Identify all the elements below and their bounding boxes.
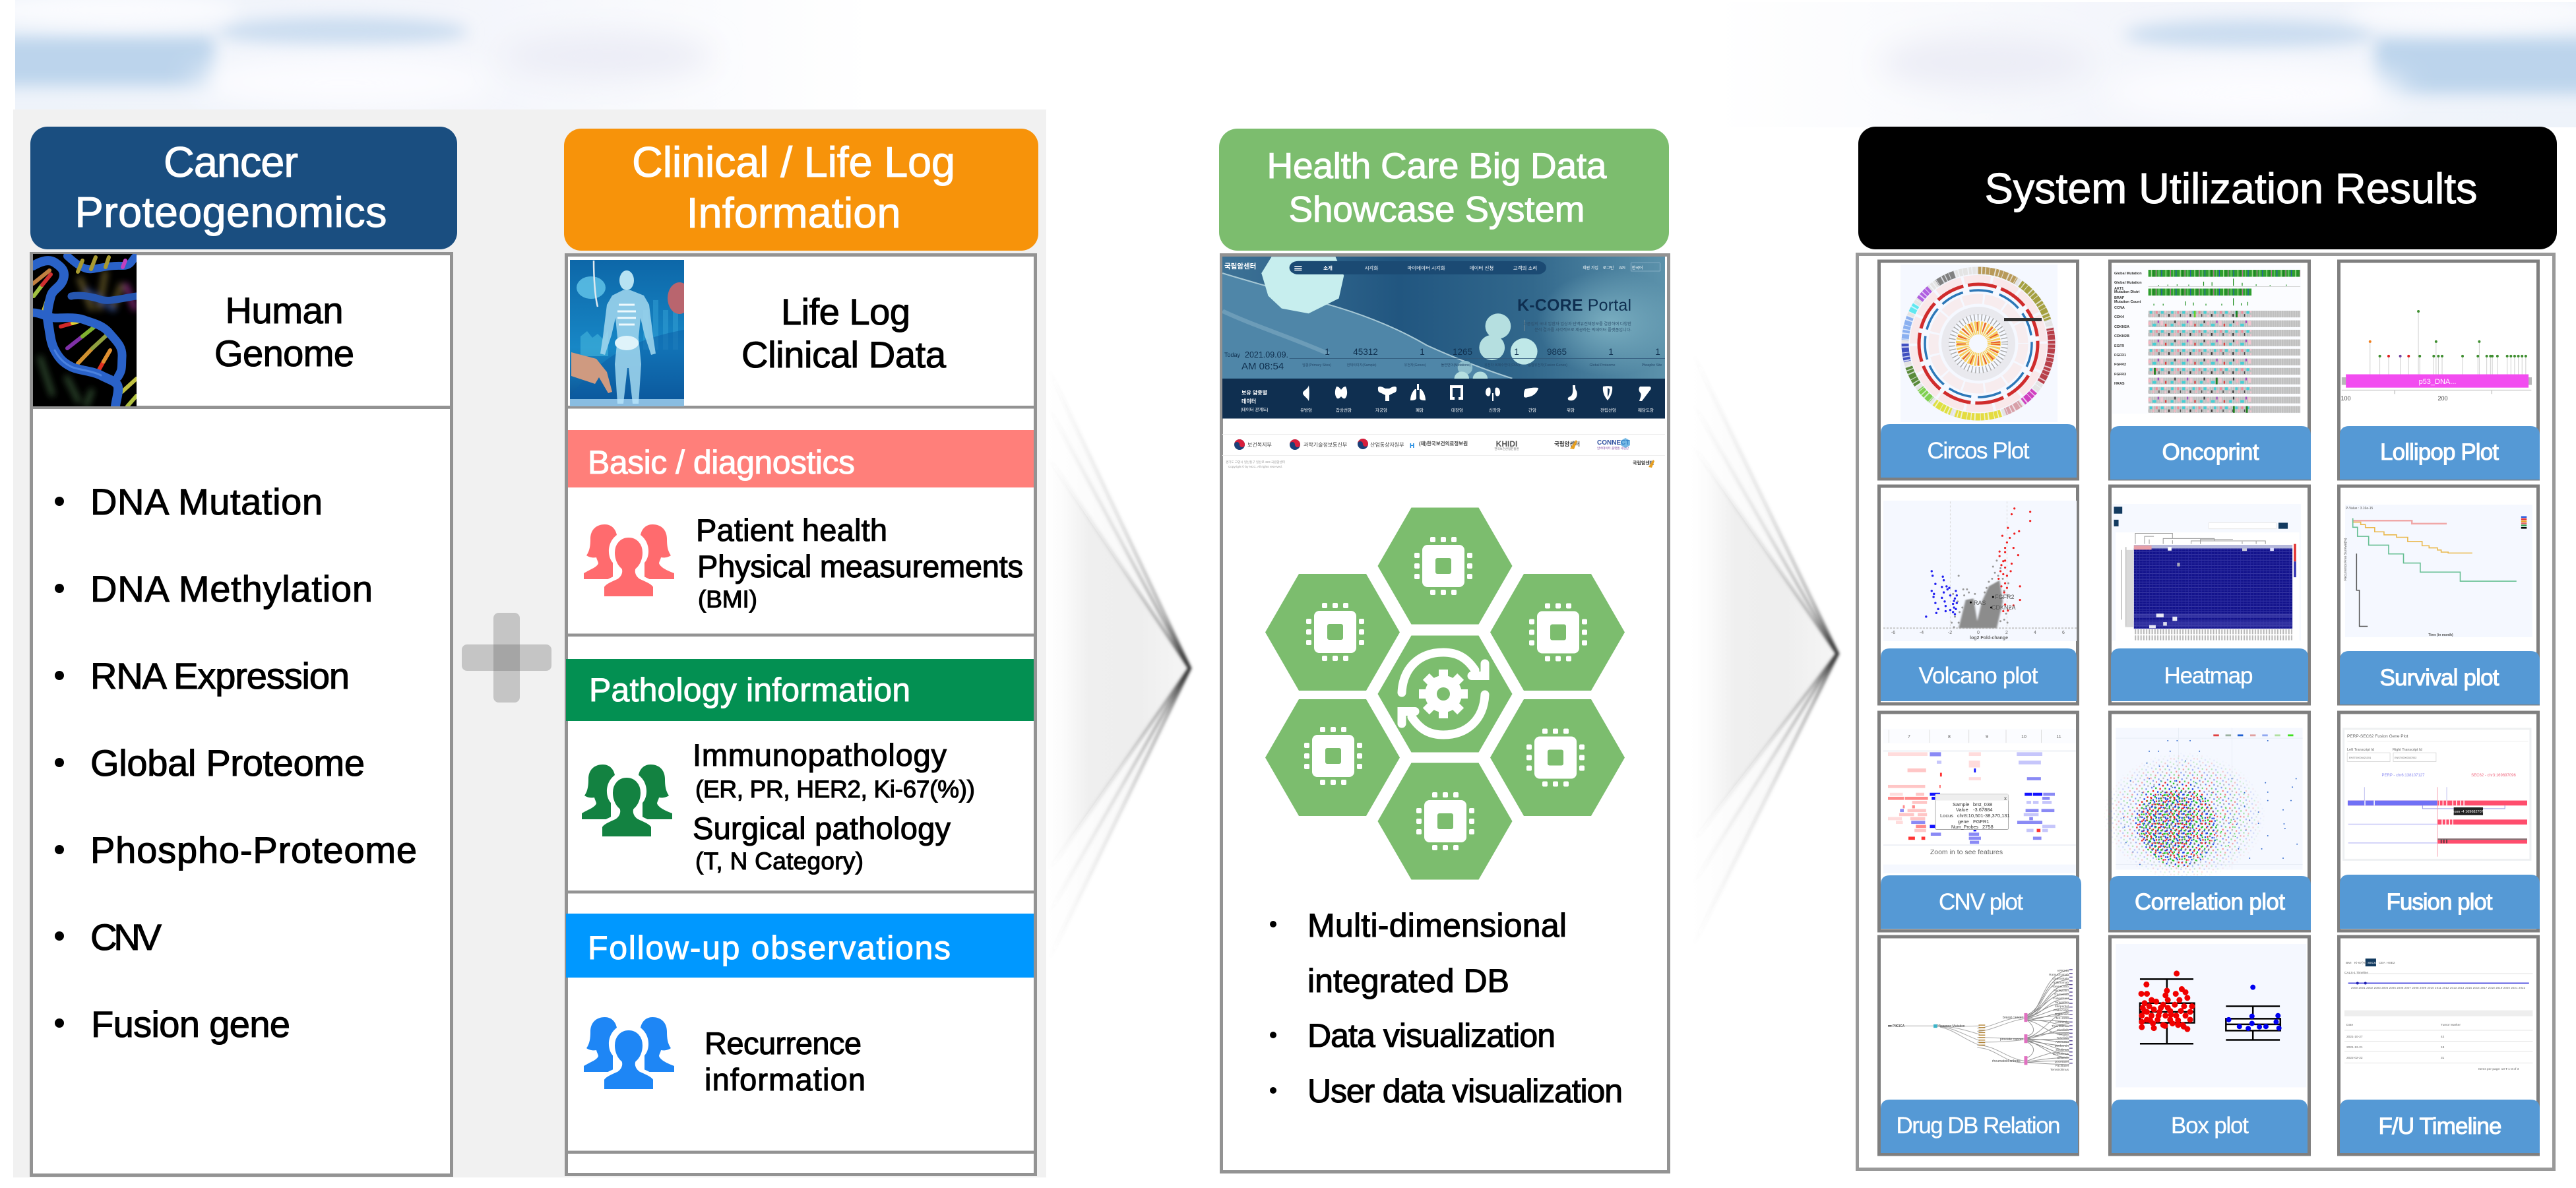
chart: CNV: 8 xyxy=(1948,735,1951,739)
chart: CNV: Sample xyxy=(1953,801,1969,807)
list: system features: Data visualization xyxy=(1307,1017,1555,1054)
strip: partner logos: 보건복지부 xyxy=(1247,441,1272,448)
bar: organ icons: 신장암 xyxy=(1489,407,1501,413)
bar: organ icons: 데이터 xyxy=(1241,398,1256,404)
cell: box plot xyxy=(2110,937,2309,1154)
section: follow-up observations: Follow-up observations xyxy=(588,929,951,966)
list: system features xyxy=(1270,907,1623,1110)
chart: oncoprint: CCNA xyxy=(2114,306,2125,310)
chart: oncoprint: HRAS xyxy=(2114,382,2125,386)
label: Heatmap xyxy=(2164,663,2253,689)
chart: lollipop: p53_DNA... xyxy=(2419,378,2456,386)
chart: fusion: Left Transcript Id xyxy=(2347,748,2374,752)
chart: drug network: prostate cancer xyxy=(2000,1038,2023,1042)
label xyxy=(2110,876,2311,930)
text: Human Genome: Genome xyxy=(214,332,354,374)
bar: organ icons: 대장암 xyxy=(1451,407,1463,413)
strip: partner logos: CONNECT xyxy=(1597,439,1629,447)
cell: volcano plot xyxy=(1879,486,2078,704)
section: pathology information: Pathology information xyxy=(589,672,910,708)
list: system features: Multi-dimensional xyxy=(1307,907,1567,944)
chart: drug network: Temsirolimus xyxy=(2050,1068,2069,1072)
label xyxy=(1881,424,2077,478)
cell: oncoprint xyxy=(2110,261,2311,480)
footer: portal address: 경기도 고양시 일산동구 일산로 323 국립암센터 xyxy=(1226,460,1285,464)
icon: people red xyxy=(584,524,674,598)
list: omics data types xyxy=(55,481,417,1045)
heading: Health Care Big Data Showcase System: Health Care Big Data xyxy=(1267,145,1607,186)
chart: timeline: CEA xyxy=(2379,961,2386,965)
chart: CNV: Num_Probes xyxy=(1951,825,1978,830)
bar: organ icons: 간암 xyxy=(1528,407,1536,413)
list: omics data types: CNV xyxy=(90,916,162,958)
text: recurrence information xyxy=(705,1026,865,1097)
chart: drug network: Tamoxifen xyxy=(2054,1001,2069,1005)
arrow: left to centre xyxy=(1046,367,1190,961)
label: Circos Plot xyxy=(1928,438,2030,464)
screenshot: K-CORE portal: 국립암센터 xyxy=(1224,262,1256,270)
cell: circos plot xyxy=(1875,241,2081,479)
cell: CNV plot xyxy=(1879,712,2081,931)
background sky: left clouds xyxy=(15,0,713,109)
chart: oncoprint: AKT1 xyxy=(2114,287,2123,291)
label: F/U Timeline xyxy=(2379,1113,2501,1139)
text: pathology details: (ER, PR, HER2, Ki-67(%)) xyxy=(695,776,975,803)
label xyxy=(2340,426,2540,480)
chart: CNV: 10 xyxy=(2021,735,2026,739)
list: omics data types: Fusion gene xyxy=(91,1003,290,1045)
chart: drug network: Stiripentol xyxy=(2055,1005,2069,1009)
footer: portal address: 국립암센터 xyxy=(1633,460,1654,466)
text: Human Genome xyxy=(214,290,354,374)
chart: fusion: ENST00000337002 xyxy=(2395,757,2416,759)
chart: drug network: Everolimus xyxy=(2053,1052,2069,1056)
list: system features: integrated DB xyxy=(1307,962,1509,999)
chart: oncoprint: EGFR xyxy=(2114,344,2124,348)
background sky: right clouds xyxy=(1877,2,2576,127)
chart: fusion: SEC62 - chr3:169697096 xyxy=(2471,774,2517,778)
chart: survival: Time (in month) xyxy=(2428,633,2453,637)
label: Fusion plot xyxy=(2387,889,2493,915)
screenshot: K-CORE portal: 45312 xyxy=(1353,347,1378,357)
chart: survival xyxy=(2344,505,2532,637)
chart: drug network: Taselisib xyxy=(2057,1036,2069,1040)
label xyxy=(1881,648,2077,701)
screenshot: K-CORE portal: 시각화 xyxy=(1365,265,1378,271)
screenshot: K-CORE portal: 암종(Primary Sites) xyxy=(1302,362,1331,367)
bar: organ icons: 자궁암 xyxy=(1375,407,1387,413)
screenshot: K-CORE portal: 1 xyxy=(1514,347,1519,357)
panel: utilization results xyxy=(1858,241,2554,1169)
text: patient health: (BMI) xyxy=(698,586,757,613)
label: Lollipop Plot xyxy=(2380,439,2499,465)
text: pathology details xyxy=(693,737,975,875)
chart: volcano: -2 xyxy=(1948,631,1952,635)
label xyxy=(2340,651,2540,704)
list: omics data types: RNA Expression xyxy=(90,655,350,697)
screenshot: K-CORE portal: 소개 xyxy=(1323,265,1333,271)
screenshot: K-CORE portal: 1 xyxy=(1420,347,1425,357)
list: omics data types: Global Proteome xyxy=(90,742,365,784)
bar: organ icons: 보유 암종별 xyxy=(1241,389,1267,396)
chart: volcano: FGFR2 xyxy=(1995,594,2015,600)
chart: oncoprint: FGFR1 xyxy=(2114,354,2126,358)
icon: hexagon cluster xyxy=(1265,508,1625,880)
chart: drug network: Paclitaxel xyxy=(2055,1064,2069,1068)
chart: drug network: MK-2206 xyxy=(2056,1016,2069,1020)
chart: volcano: CDKN2A xyxy=(1992,604,2016,611)
chart: drug network: Trametinib xyxy=(2054,993,2069,997)
chart: oncoprint: Global Mutation xyxy=(2114,272,2142,276)
panel: cancer proteogenomics xyxy=(32,253,452,1175)
icon: people green xyxy=(582,765,672,838)
footer: portal address xyxy=(1226,460,1654,468)
screenshot: K-CORE portal: 9865 xyxy=(1547,347,1567,357)
section: pathology information xyxy=(566,659,1034,875)
cell: follow-up timeline xyxy=(2339,937,2540,1154)
chart: timeline: 2021-10-27 xyxy=(2346,1035,2363,1039)
chart: oncoprint: CDK4 xyxy=(2114,315,2125,319)
screenshot: K-CORE portal: 유전자 복제수변이(CNV) xyxy=(1484,362,1520,367)
screenshot: K-CORE portal: API xyxy=(1619,266,1625,270)
chart: oncoprint: BRAF xyxy=(2114,296,2125,300)
chart: box plot xyxy=(2116,944,2306,1087)
section: basic diagnostics: Basic / diagnostics xyxy=(588,444,855,481)
chart: volcano: 6 xyxy=(2062,631,2065,635)
chart: oncoprint xyxy=(2112,265,2301,414)
heading: Cancer Proteogenomics xyxy=(30,127,457,249)
chart: lollipop: 200 xyxy=(2437,395,2448,402)
image: DNA helix xyxy=(33,254,137,406)
screenshot: K-CORE portal: 1 xyxy=(1325,347,1330,357)
label: Oncoprint xyxy=(2162,439,2259,465)
text: Human Genome: Human xyxy=(226,290,343,331)
footer: portal address: Copyright © by NCC. All rights reserved. xyxy=(1228,464,1282,468)
screenshot: K-CORE portal: 회원 가입 xyxy=(1583,265,1598,270)
bar: organ icons: 췌담도암 xyxy=(1638,408,1654,413)
chart: drug network: Letrozole xyxy=(2056,1020,2069,1024)
chart: CNV: 9 xyxy=(1986,735,1988,739)
chart: CNV: Locus xyxy=(1940,813,1953,819)
chart: drug network: Docetaxel xyxy=(2055,1060,2069,1064)
chart: volcano: 2 xyxy=(2005,631,2008,635)
cell: heatmap xyxy=(2110,486,2309,704)
label: Volcano plot xyxy=(1918,663,2038,689)
screenshot: K-CORE portal: 전체이미지(Sample) xyxy=(1347,362,1377,367)
chart: lollipop: 100 xyxy=(2340,395,2351,402)
screenshot: K-CORE portal: K-CORE Portal xyxy=(1517,296,1631,315)
label xyxy=(1881,875,2081,929)
cell: correlation plot xyxy=(2103,712,2311,931)
text: recurrence information: information xyxy=(705,1062,865,1097)
chart: drug network: Buparlisib xyxy=(2055,1013,2069,1016)
label: CNV plot xyxy=(1939,889,2023,915)
chart: timeline: 2000 2001 2002 2003 2004 2005 2006 2007 2008 2009 2010 2011 2012 2013 2014 2015 2016 2017 2018 2019 2020 2021 2022 xyxy=(2351,986,2526,989)
arrow: centre to results xyxy=(1691,351,1838,948)
strip: partner logos: 국립암센터 xyxy=(1554,441,1580,447)
heading: System Utilization Results xyxy=(1858,127,2557,249)
chart: CNV: chr8:10,501-38,370,131 xyxy=(1957,813,2010,819)
section: basic diagnostics xyxy=(568,430,1034,613)
chart: timeline: Date xyxy=(2346,1023,2353,1027)
chart: fusion: Right Transcript Id xyxy=(2393,748,2422,752)
strip: partner logos: KHIDI xyxy=(1496,439,1517,449)
chart: drug network: Pictilisib xyxy=(2058,1028,2069,1032)
icon: plus sign xyxy=(462,613,551,703)
strip: partner logos: H xyxy=(1410,443,1414,450)
bar: organ icons: 폐암 xyxy=(1416,407,1424,413)
chart: CNV: 7 xyxy=(1908,735,1910,739)
heading: Cancer Proteogenomics: Proteogenomics xyxy=(75,188,387,236)
chart: timeline: CALS-1 Timeline xyxy=(2344,971,2368,975)
bar: organ icons: 위암 xyxy=(1567,408,1575,413)
screenshot: K-CORE portal: 1 xyxy=(1608,347,1614,357)
strip: partner logos: 한국보건산업진흥원 xyxy=(1494,447,1519,451)
label xyxy=(2340,875,2540,929)
chart: volcano: log2 Fold-change xyxy=(1970,636,2008,641)
chart: drug network: PIK3CA xyxy=(1893,1024,1905,1028)
chart: CNV xyxy=(1883,729,2076,873)
chart: volcano: -6 xyxy=(1891,631,1895,635)
chart: CNV: gene xyxy=(1958,819,1969,825)
chart: oncoprint: Global Mutation xyxy=(2114,281,2142,285)
heading: Clinical / Life Log Information xyxy=(564,129,1038,251)
chart: CNV: brst_038 xyxy=(1973,801,1992,807)
screenshot: K-CORE portal: 유전자(Genes) xyxy=(1404,362,1426,367)
chart: timeline: BMI xyxy=(2346,961,2352,965)
chart: fusion: PERP-SEC62 Fusion Gene Plot xyxy=(2347,734,2408,739)
icon: gear with cycle arrows xyxy=(1402,652,1485,735)
text: pathology details: Surgical pathology xyxy=(693,811,951,846)
list: omics data types: Phospho-Proteome xyxy=(90,829,417,871)
list: omics data types: DNA Methylation xyxy=(90,568,373,610)
chart: CNV: -3.67884 xyxy=(1973,807,1993,813)
screenshot: K-CORE portal: 돌연변이(Mutations) xyxy=(1441,362,1471,367)
chart: timeline: SEC62 xyxy=(2368,961,2378,965)
cell: survival plot xyxy=(2339,486,2540,704)
strip: partner logos: 과학기술정보통신부 xyxy=(1304,441,1347,448)
label: Drug DB Relation xyxy=(1896,1113,2061,1139)
list: system features: User data visualization xyxy=(1307,1073,1623,1110)
chart: timeline xyxy=(2344,958,2532,1071)
chart: drug network: Fulvestrant xyxy=(2053,997,2069,1001)
chart: correlation scatter xyxy=(2103,728,2303,880)
screenshot: K-CORE portal: 마이데이터 시각화 xyxy=(1407,265,1445,271)
chart: timeline: 2021-12-21 xyxy=(2346,1046,2363,1049)
chart: heatmap xyxy=(2112,504,2301,641)
label: Box plot xyxy=(2171,1113,2249,1139)
chart: drug network: Metformin xyxy=(2055,1044,2069,1048)
chart: CNV: Value xyxy=(1956,807,1968,813)
heading: Clinical / Life Log Information: Information xyxy=(686,189,901,237)
heading: Clinical / Life Log Information: Clinical / Life Log xyxy=(632,138,955,186)
cell: drug DB relation xyxy=(1879,937,2078,1154)
chart: CNV: 2758 xyxy=(1982,824,1994,830)
chart: CNV: FGFR1 xyxy=(1973,819,1990,825)
light grey backdrop behind left columns xyxy=(13,109,1046,1177)
bar: organ icons: 전립선암 xyxy=(1600,407,1616,413)
chart: CNV: x xyxy=(2004,796,2007,801)
chart: timeline: Tumor Marker xyxy=(2441,1023,2461,1027)
chart: drug network: Abemaciclib xyxy=(2052,985,2069,989)
chart: timeline: 18 xyxy=(2441,1046,2445,1049)
chart: volcano: 0 xyxy=(1977,631,1980,635)
chart: volcano: 4 xyxy=(2034,631,2036,635)
chart: circos xyxy=(1875,241,2081,447)
strip: partner logos xyxy=(1222,434,1665,456)
chart: survival: Recurrence Free Survival(%) xyxy=(2344,538,2348,580)
chart: CNV: Zoom in to see features xyxy=(1930,848,2003,856)
screenshot: K-CORE portal: Global Proteome xyxy=(1590,363,1616,367)
screenshot: K-CORE portal: 융합유전자(Fusion Genes) xyxy=(1528,362,1567,367)
bar: organ icons xyxy=(1222,379,1665,418)
screenshot: K-CORE portal: 1265 xyxy=(1453,347,1472,357)
label: Correlation plot xyxy=(2135,889,2285,915)
label xyxy=(2340,1100,2540,1153)
chart: timeline: 42 xyxy=(2441,1035,2445,1039)
chart: drug network: Alpelisib xyxy=(2057,1032,2069,1036)
chart: drug network: rheumatoid arthritis xyxy=(1992,1059,2021,1063)
screenshot: K-CORE portal: AM 08:54 xyxy=(1241,361,1284,372)
image: human body scan xyxy=(570,260,691,406)
heading: Health Care Big Data Showcase System xyxy=(1219,129,1669,251)
screenshot: K-CORE portal: 2021.09.09. xyxy=(1245,350,1288,360)
bar: organ icons: 갑상선암 xyxy=(1336,407,1352,413)
chart: fusion: PERP - chr6:138107127 xyxy=(2382,774,2425,778)
chart: oncoprint: Mutation Count xyxy=(2114,300,2141,304)
chart: oncoprint: FGFR2 xyxy=(2114,363,2126,367)
chart: fusion: exon -4 169682707 xyxy=(2452,810,2484,814)
chart: volcano: -4 xyxy=(1920,631,1924,635)
list: omics data types: DNA Mutation xyxy=(90,481,323,522)
chart: drug network: Nedaplatin xyxy=(2054,989,2069,993)
bar: organ icons: 유방암 xyxy=(1300,407,1312,413)
chart: drug network: Missense Mutation xyxy=(1937,1024,1965,1028)
strip: partner logos: 산업통상자원부 xyxy=(1370,441,1404,448)
heading: Cancer Proteogenomics: Cancer xyxy=(164,138,298,186)
strip: partner logos: 암빅데이터 플랫폼 사업단 xyxy=(1597,446,1629,451)
bar: organ icons: [데이터 관계도] xyxy=(1241,406,1268,412)
panel: clinical and life log xyxy=(566,255,1036,1174)
chart: drug network: APR246 xyxy=(2057,969,2069,973)
label xyxy=(2110,426,2311,480)
heading: Health Care Big Data Showcase System: Showcase System xyxy=(1289,189,1585,230)
screenshot: K-CORE portal: 데이터 신청 xyxy=(1470,265,1493,271)
label xyxy=(2112,1100,2308,1153)
chart: volcano xyxy=(1883,501,2077,641)
heading: System Utilization Results: System Utilization Results xyxy=(1984,164,2478,212)
chart: timeline: 31 xyxy=(2441,1056,2445,1060)
chart: oncoprint: Mutation Distri xyxy=(2114,290,2140,294)
text: patient health: Physical measurements xyxy=(697,549,1023,584)
cell: lollipop plot xyxy=(2339,261,2540,480)
chart: timeline: Items per page: 10 ▾ 1-3 of 3 xyxy=(2478,1067,2519,1071)
chart: drug network: breast cancer xyxy=(2003,1016,2023,1020)
chart: drug network: Erlotinib xyxy=(2058,1056,2069,1060)
screenshot: K-CORE portal: 분석 결과를 시각적으로 제공하는 빅데이터 플랫폼입니다. xyxy=(1534,327,1631,332)
strip: partner logos: (재)한국보건의료정보원 xyxy=(1419,440,1468,447)
screenshot: K-CORE portal: 고품질의 국내 암환자 임상과 단백유전체정보를 결합하여 다양한 xyxy=(1523,321,1631,327)
label: Survival plot xyxy=(2380,665,2499,691)
chart: fusion xyxy=(2344,729,2530,860)
section: follow-up observations xyxy=(566,914,1034,1097)
screenshot: K-CORE portal: 1 xyxy=(1655,347,1660,357)
chart: timeline: 2022-02-22 xyxy=(2346,1056,2363,1060)
chart: drug network: Ramucirumab xyxy=(2049,973,2069,977)
chart: drug network: Thioridazine xyxy=(2052,1024,2069,1028)
text: pathology details: (T, N Category) xyxy=(695,848,864,875)
chart: oncoprint: CDKN2A xyxy=(2114,325,2129,329)
chart: survival: P-Value : 3.16e-15 xyxy=(2346,507,2373,511)
text: Life Log Clinical Data: Life Log xyxy=(781,291,910,332)
text: Life Log Clinical Data: Clinical Data xyxy=(741,334,947,375)
chart: volcano: RAS xyxy=(1974,600,1986,606)
chart: oncoprint: CDKN2B xyxy=(2114,334,2129,338)
cell: fusion plot xyxy=(2339,712,2540,931)
chart: oncoprint: FGFR3 xyxy=(2114,373,2126,377)
screenshot: K-CORE portal: 고객의 소리 xyxy=(1513,265,1537,271)
chart: drug network: Gadoxetate xyxy=(2052,977,2069,981)
chart: drug network: Ipilimumab xyxy=(2054,981,2069,985)
chart: drug network: Sirolimus xyxy=(2056,1048,2069,1052)
chart: lollipop xyxy=(2340,311,2532,402)
screenshot: K-CORE portal: Today xyxy=(1224,352,1241,358)
chart: fusion: ENST00000421351 xyxy=(2349,757,2371,759)
chart: timeline: Ki-67(%) xyxy=(2354,961,2367,965)
label xyxy=(1881,1100,2078,1153)
screenshot: K-CORE portal: 한국어 xyxy=(1632,265,1643,270)
text: pathology details: Immunopathology xyxy=(693,737,947,772)
text: patient health xyxy=(696,513,1023,613)
label xyxy=(2111,648,2308,701)
panel: showcase system xyxy=(1222,255,1682,1172)
screenshot: K-CORE portal: 로그인 xyxy=(1603,266,1614,270)
text: patient health: Patient health xyxy=(696,513,887,547)
screenshot: K-CORE portal: Phospho Site xyxy=(1642,363,1662,367)
chart: drug network: Palbociclib xyxy=(2054,1009,2069,1013)
chart: drug network xyxy=(1888,969,2073,1072)
chart: drug network: AZD5363 xyxy=(2056,1040,2069,1044)
screenshot: K-CORE portal xyxy=(1222,257,1682,468)
text: recurrence information: Recurrence xyxy=(705,1026,862,1061)
chart: timeline: HSE2 xyxy=(2387,961,2395,965)
icon: people blue xyxy=(584,1017,674,1091)
chart: CNV: 11 xyxy=(2056,735,2061,739)
text: Life Log Clinical Data xyxy=(741,291,947,375)
